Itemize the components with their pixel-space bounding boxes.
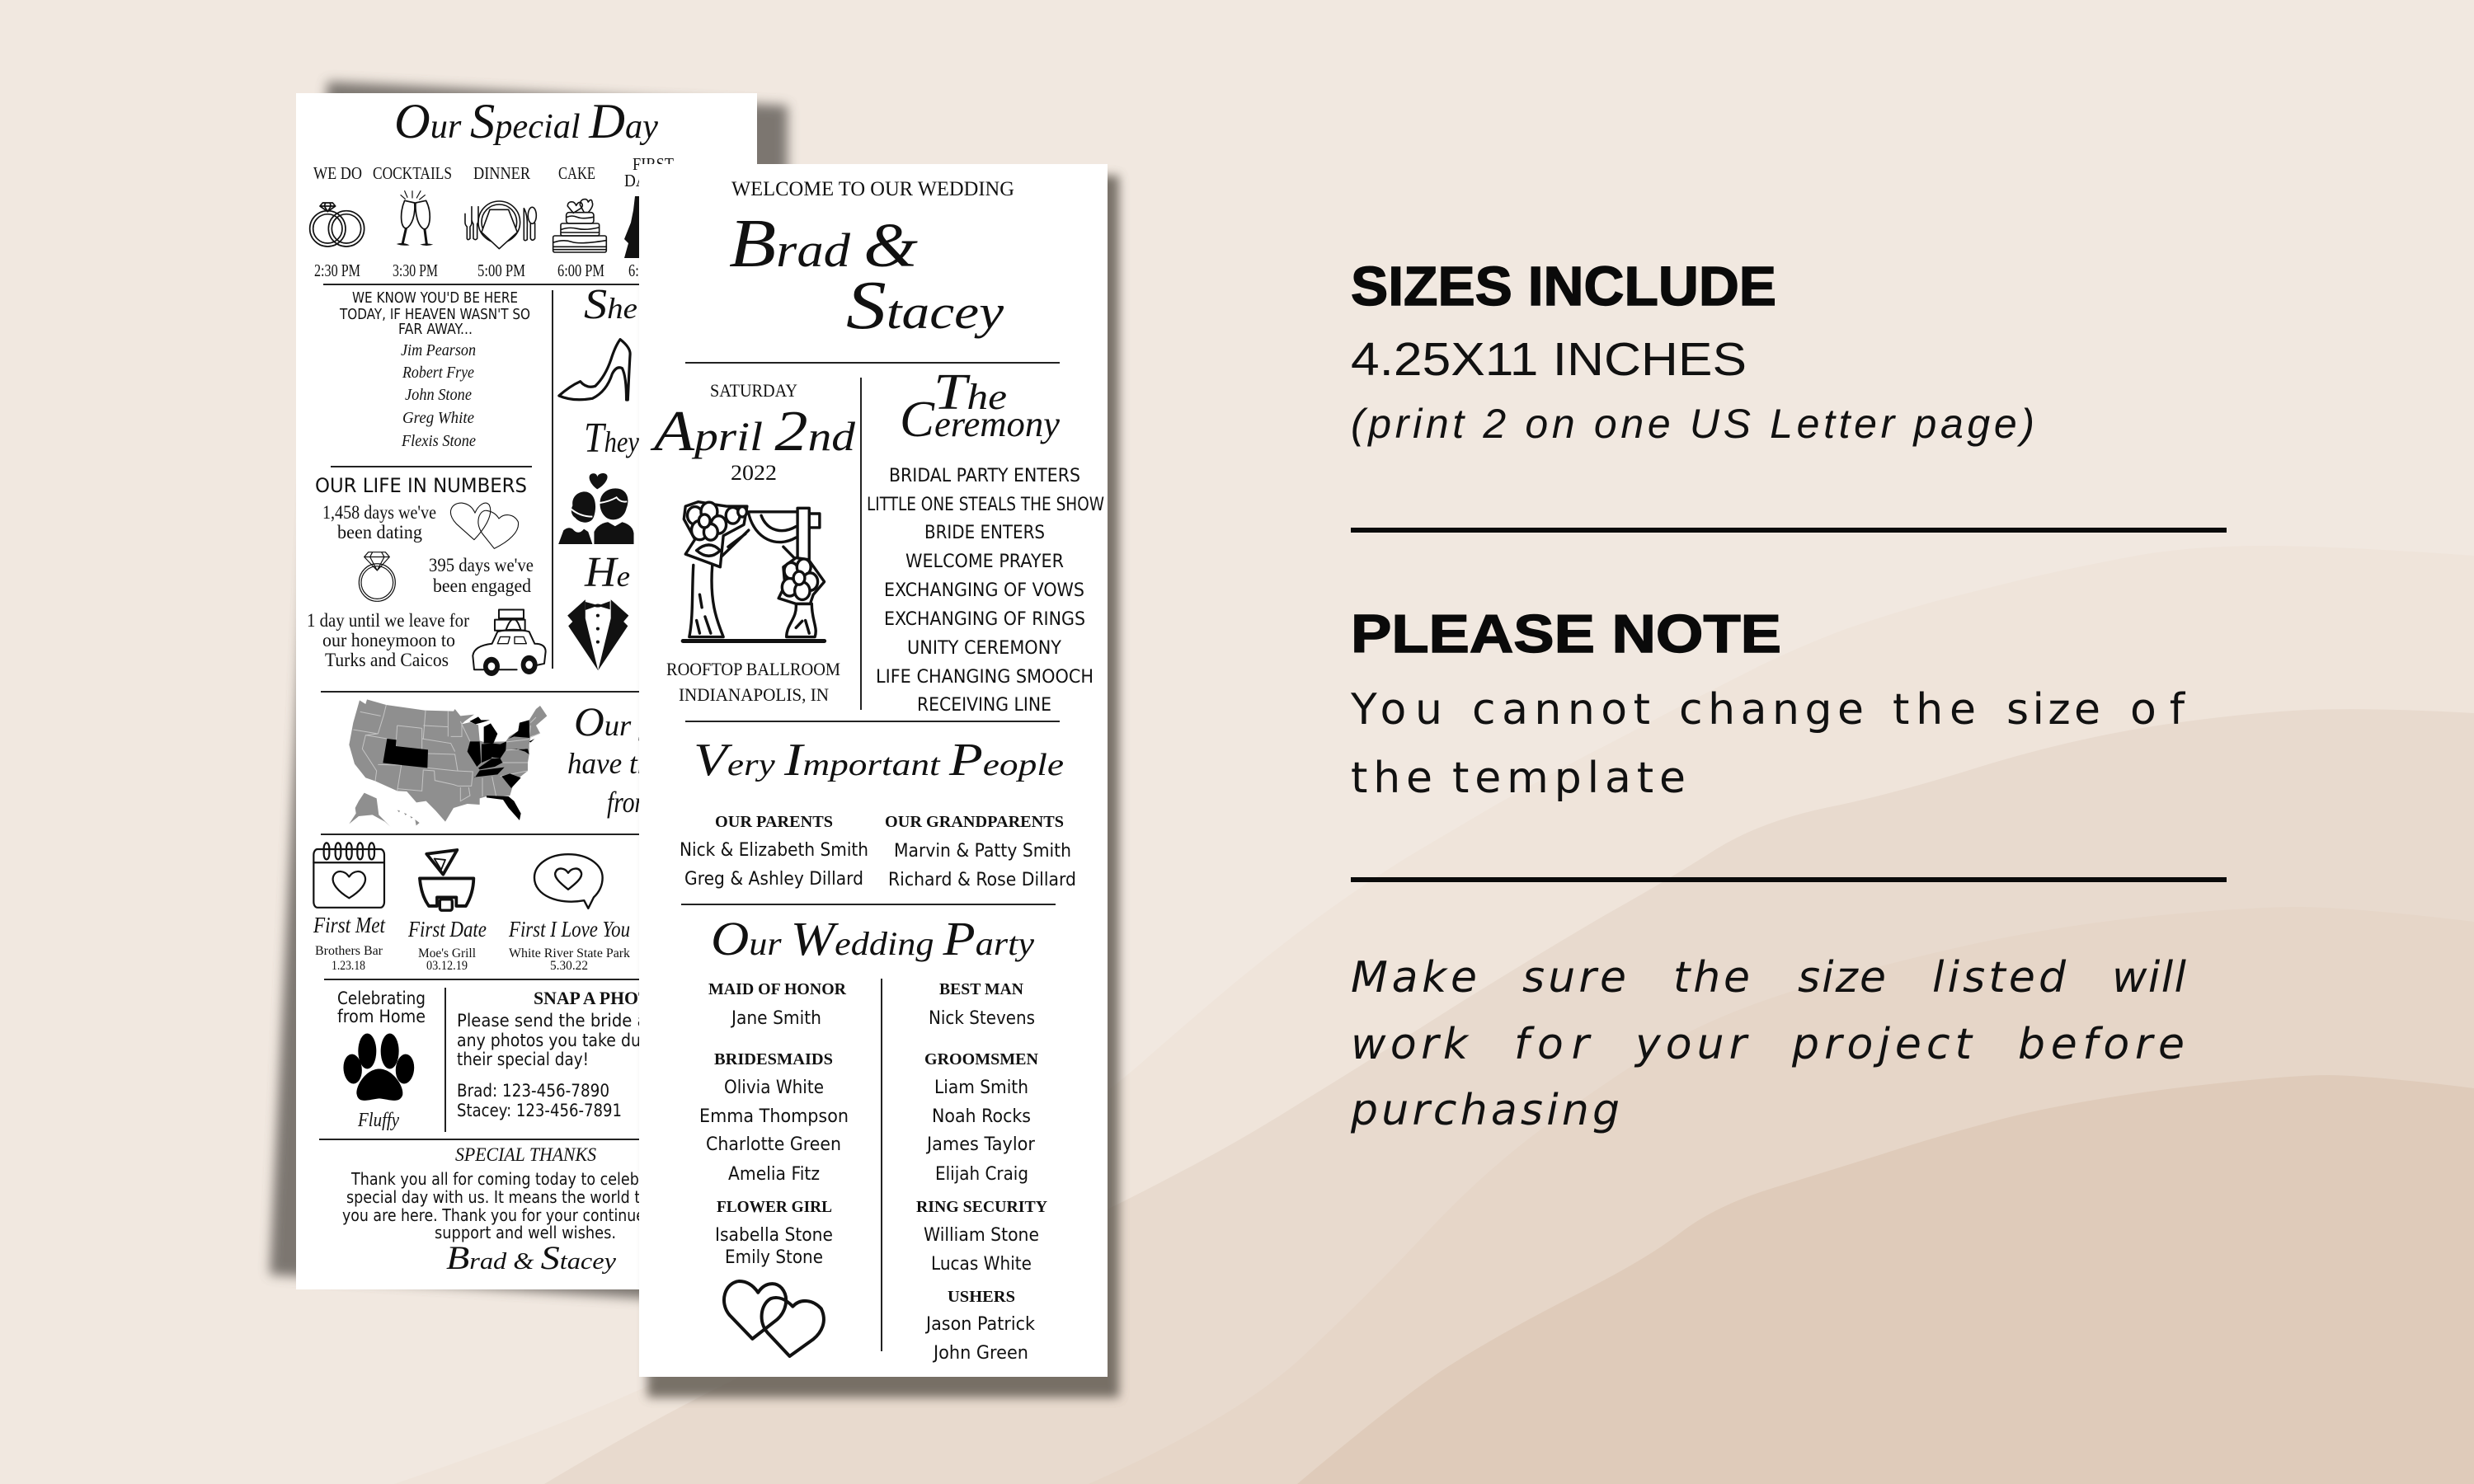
VIP column headings — [715, 813, 1064, 831]
pet name: Fluffy — [357, 1110, 399, 1131]
life in numbers text: 1 day until we leave for — [307, 610, 469, 631]
script heading: Our Wedding Party: Our Wedding Party — [711, 912, 1034, 965]
timeline times: 3:30 PM — [393, 261, 438, 280]
icon: floral wedding arch — [683, 502, 825, 641]
divider — [323, 284, 639, 285]
celebrating from home text — [337, 989, 426, 1026]
snap a photo body: Please send the bride and groom — [457, 1011, 725, 1031]
ceremony order list: LIFE CHANGING SMOOCH — [876, 667, 1094, 688]
wedding party names: Emily Stone — [725, 1247, 823, 1268]
venue — [666, 659, 840, 705]
script: Our guests have traveled from: from — [607, 786, 652, 819]
special thanks body: Thank you all for coming today to celebrate this — [350, 1169, 699, 1189]
shadow of front card — [647, 176, 1119, 1397]
timeline labels: CAKE — [558, 163, 595, 183]
text: cannot change size: template — [1452, 754, 1686, 803]
timeline times: 6:30 PM — [628, 261, 675, 280]
wedding party names: Nick Stevens — [929, 1008, 1035, 1029]
wedding party names: Liam Smith — [934, 1078, 1028, 1098]
VIP names: Marvin & Patty Smith — [894, 841, 1071, 862]
wedding party names: Emma Thompson — [699, 1106, 849, 1127]
ceremony order list: BRIDE ENTERS — [924, 523, 1045, 543]
text: make sure note: size — [1798, 953, 1886, 1003]
VIP names: Greg & Ashley Dillard — [684, 869, 863, 890]
date block: 2022 — [731, 461, 777, 485]
memorial names: Flexis Stone — [401, 432, 476, 450]
how we met details: Brothers Bar — [315, 944, 383, 958]
special thanks body: you are here. Thank you for your continued — [342, 1205, 654, 1225]
script: Our guests have traveled from: Our guests — [574, 698, 714, 744]
ceremony order list: BRIDAL PARTY ENTERS — [889, 466, 1080, 486]
venue: ROOFTOP BALLROOM — [666, 659, 840, 679]
icon: linked hearts — [724, 1281, 824, 1356]
shadow of back card — [270, 82, 788, 1299]
text: cannot change size: change — [1679, 685, 1864, 735]
memorial names: John Stone — [405, 386, 472, 404]
wedding party names: Elijah Craig — [935, 1164, 1028, 1185]
wedding party names: Charlotte Green — [706, 1134, 841, 1155]
timeline times: 5:00 PM — [477, 261, 525, 280]
life in numbers text — [307, 502, 534, 670]
life in numbers text: our honeymoon to — [322, 630, 455, 650]
ceremony order list: UNITY CEREMONY — [907, 638, 1062, 659]
wedding party role headings: GROOMSMEN — [924, 1050, 1039, 1068]
script names — [729, 205, 1004, 344]
chart: US map with visited states — [349, 699, 547, 827]
how we met details: 5.30.22 — [550, 959, 588, 973]
icon: honeymoon car — [473, 609, 546, 676]
wedding party names: Lucas White — [931, 1254, 1032, 1275]
VIP column headings: OUR PARENTS — [715, 813, 833, 831]
heading: Sizes Include: SIZES INCLUDE — [1351, 256, 1776, 317]
life in numbers text: been engaged — [433, 575, 531, 596]
ceremony order list — [867, 466, 1104, 716]
script: He: He — [584, 549, 630, 596]
how we met details: 03.12.19 — [426, 959, 468, 973]
text: make sure note: will — [2112, 953, 2187, 1003]
script: She: She — [584, 281, 637, 328]
panel: back card Our Special Day — [296, 93, 757, 1289]
text: make sure note: Make — [1351, 953, 1477, 1003]
text: print note: (print 2 on one US Letter page) — [1351, 401, 2034, 447]
wedding party role headings: BEST MAN — [939, 980, 1024, 998]
script heading: The Ceremony: Ceremony — [900, 392, 1060, 448]
memorial names: Greg White — [402, 409, 474, 427]
wedding party names — [699, 1008, 1039, 1364]
timeline times: 2:30 PM — [314, 261, 360, 280]
script names: Stacey — [846, 267, 1004, 344]
memorial names: Robert Frye — [402, 364, 474, 382]
snap a photo body: any photos you take during — [457, 1031, 671, 1050]
snap a photo body: their special day! — [457, 1050, 589, 1069]
wedding party role headings: BRIDESMAIDS — [714, 1050, 833, 1068]
icon: wedding cake — [553, 200, 606, 252]
wedding party names: Olivia White — [724, 1078, 824, 1098]
text: make sure note: listed — [1932, 953, 2067, 1003]
icon: first date food — [420, 850, 473, 910]
text: cannot change size: of — [2130, 685, 2186, 735]
date block: April 2nd — [650, 400, 856, 463]
VIP names: Richard & Rose Dillard — [888, 870, 1076, 890]
life in numbers text: been dating — [337, 522, 422, 542]
text: cannot change size — [1350, 685, 2186, 803]
ceremony order list: RECEIVING LINE — [917, 695, 1051, 716]
venue: INDIANAPOLIS, IN — [679, 684, 829, 705]
wedding party names: Amelia Fitz — [728, 1164, 820, 1185]
life in numbers text: 1,458 days we've — [322, 502, 436, 523]
panel: front card Welcome — [639, 164, 1108, 1377]
heading: Please Note: PLEASE NOTE — [1351, 603, 1781, 664]
timeline times — [314, 261, 675, 280]
memorial text: WE KNOW YOU'D BE HERE — [352, 289, 518, 307]
timeline labels — [313, 154, 679, 190]
welcome line: WELCOME TO OUR WEDDING — [731, 178, 1014, 200]
wedding party names: Noah Rocks — [932, 1106, 1031, 1127]
ceremony order list: WELCOME PRAYER — [905, 552, 1064, 572]
text: cannot change size: the — [1893, 685, 1976, 735]
text: make sure note: before — [2018, 1020, 2185, 1069]
heading: snap a photo: SNAP A PHOTO — [534, 988, 664, 1008]
snap a photo body: Stacey: 123-456-7891 — [457, 1101, 622, 1120]
wedding party role headings: RING SECURITY — [916, 1198, 1048, 1216]
icon: paw print — [341, 1033, 417, 1101]
special thanks body: support and well wishes. — [435, 1223, 616, 1242]
icon: tuxedo — [567, 599, 628, 670]
special thanks body — [342, 1169, 704, 1242]
script: Our guests have traveled from — [567, 698, 725, 819]
script: They: They — [584, 415, 639, 462]
text: cannot change size: size — [2006, 685, 2100, 735]
ceremony order list: EXCHANGING OF VOWS — [884, 580, 1084, 601]
how we met titles: First Date — [407, 917, 487, 942]
text: make sure note — [1350, 953, 2187, 1135]
timeline times: 6:00 PM — [557, 261, 604, 280]
celebrating from home text: Celebrating — [337, 989, 426, 1008]
script: Our guests have traveled from: have traveled — [567, 747, 725, 780]
icon: love speech bubble — [534, 854, 603, 909]
vertical divider — [552, 290, 553, 669]
memorial text: FAR AWAY... — [398, 321, 473, 338]
snap a photo body — [457, 1011, 725, 1120]
wedding party names: Isabella Stone — [715, 1225, 833, 1246]
how we met details: 1.23.18 — [332, 959, 365, 973]
icon: calendar heart — [313, 843, 384, 908]
text: cannot change size: the — [1351, 754, 1432, 803]
timeline labels: FIRST — [633, 154, 674, 174]
memorial text — [339, 289, 530, 338]
memorial text: TODAY, IF HEAVEN WASN'T SO — [339, 306, 530, 323]
wedding party names: Jane Smith — [730, 1008, 821, 1029]
icon: outline hearts — [450, 503, 519, 548]
script heading: The Ceremony: The — [934, 364, 1007, 420]
timeline labels: DANCE — [624, 171, 679, 190]
heading: special thanks: SPECIAL THANKS — [455, 1144, 596, 1165]
script signature: Brad & Stacey — [446, 1239, 617, 1276]
VIP names: Nick & Elizabeth Smith — [680, 840, 868, 861]
life in numbers text: 395 days we've — [429, 555, 534, 575]
how we met titles: First I Love You — [508, 917, 630, 942]
icon: couple — [558, 473, 634, 544]
wedding party role headings — [708, 980, 1048, 1306]
wedding party role headings: USHERS — [948, 1288, 1015, 1306]
text: make sure note: the — [1673, 953, 1750, 1003]
icon: wedding rings — [310, 203, 365, 247]
how we met details: Moe's Grill — [418, 946, 477, 960]
wedding party role headings: MAID OF HONOR — [708, 980, 847, 998]
text: cannot change size: You — [1350, 685, 1442, 735]
text: make sure note: project — [1791, 1020, 1973, 1069]
life in numbers text: Turks and Caicos — [325, 650, 449, 670]
wedding party names: William Stone — [924, 1225, 1039, 1246]
title: Our Special Day: Our Special Day — [394, 94, 658, 148]
script heading: The Ceremony — [900, 364, 1060, 448]
text: make sure note: purchasing — [1350, 1086, 1620, 1135]
text: make sure note: sure — [1522, 953, 1626, 1003]
date block: SATURDAY — [710, 380, 797, 401]
icon: place setting — [465, 201, 536, 249]
icon: champagne flutes — [397, 191, 433, 246]
how we met details: White River State Park — [509, 946, 630, 960]
text: make sure note: work — [1351, 1020, 1470, 1069]
text: make sure note: for — [1514, 1020, 1592, 1069]
how we met titles — [313, 913, 630, 942]
special thanks body: special day with us. It means the world to us that — [346, 1187, 704, 1207]
VIP names — [680, 840, 1076, 890]
wedding party names: John Green — [932, 1343, 1028, 1364]
how we met details — [315, 944, 630, 973]
memorial names — [401, 341, 476, 450]
text: make sure note: your — [1634, 1020, 1750, 1069]
how we met titles: First Met — [313, 913, 386, 937]
timeline labels: WE DO — [313, 163, 362, 183]
wedding party names: Jason Patrick — [924, 1314, 1035, 1335]
date block — [650, 380, 856, 485]
wedding party names: James Taylor — [925, 1134, 1036, 1155]
text: sizes: 4.25X11 INCHES — [1351, 333, 1747, 386]
icon: high heel — [559, 340, 630, 400]
VIP column headings: OUR GRANDPARENTS — [885, 813, 1064, 831]
script heading: Very Important People: Very Important People — [694, 735, 1064, 786]
celebrating from home text: from Home — [337, 1007, 426, 1026]
script names: Brad & — [729, 205, 918, 282]
memorial names: Jim Pearson — [401, 341, 476, 359]
icon: diamond ring — [359, 552, 395, 601]
heading: Our Life in Numbers: OUR LIFE IN NUMBERS — [315, 474, 527, 497]
timeline labels: COCKTAILS — [373, 163, 452, 183]
ceremony order list: LITTLE ONE STEALS THE SHOW — [867, 495, 1104, 515]
timeline labels: DINNER — [473, 163, 530, 183]
text: cannot change size: cannot — [1472, 685, 1650, 735]
ceremony order list: EXCHANGING OF RINGS — [884, 609, 1085, 630]
wedding party role headings: FLOWER GIRL — [717, 1198, 832, 1216]
snap a photo body: Brad: 123-456-7890 — [457, 1081, 609, 1101]
icon: dancing couple silhouette — [624, 196, 639, 258]
